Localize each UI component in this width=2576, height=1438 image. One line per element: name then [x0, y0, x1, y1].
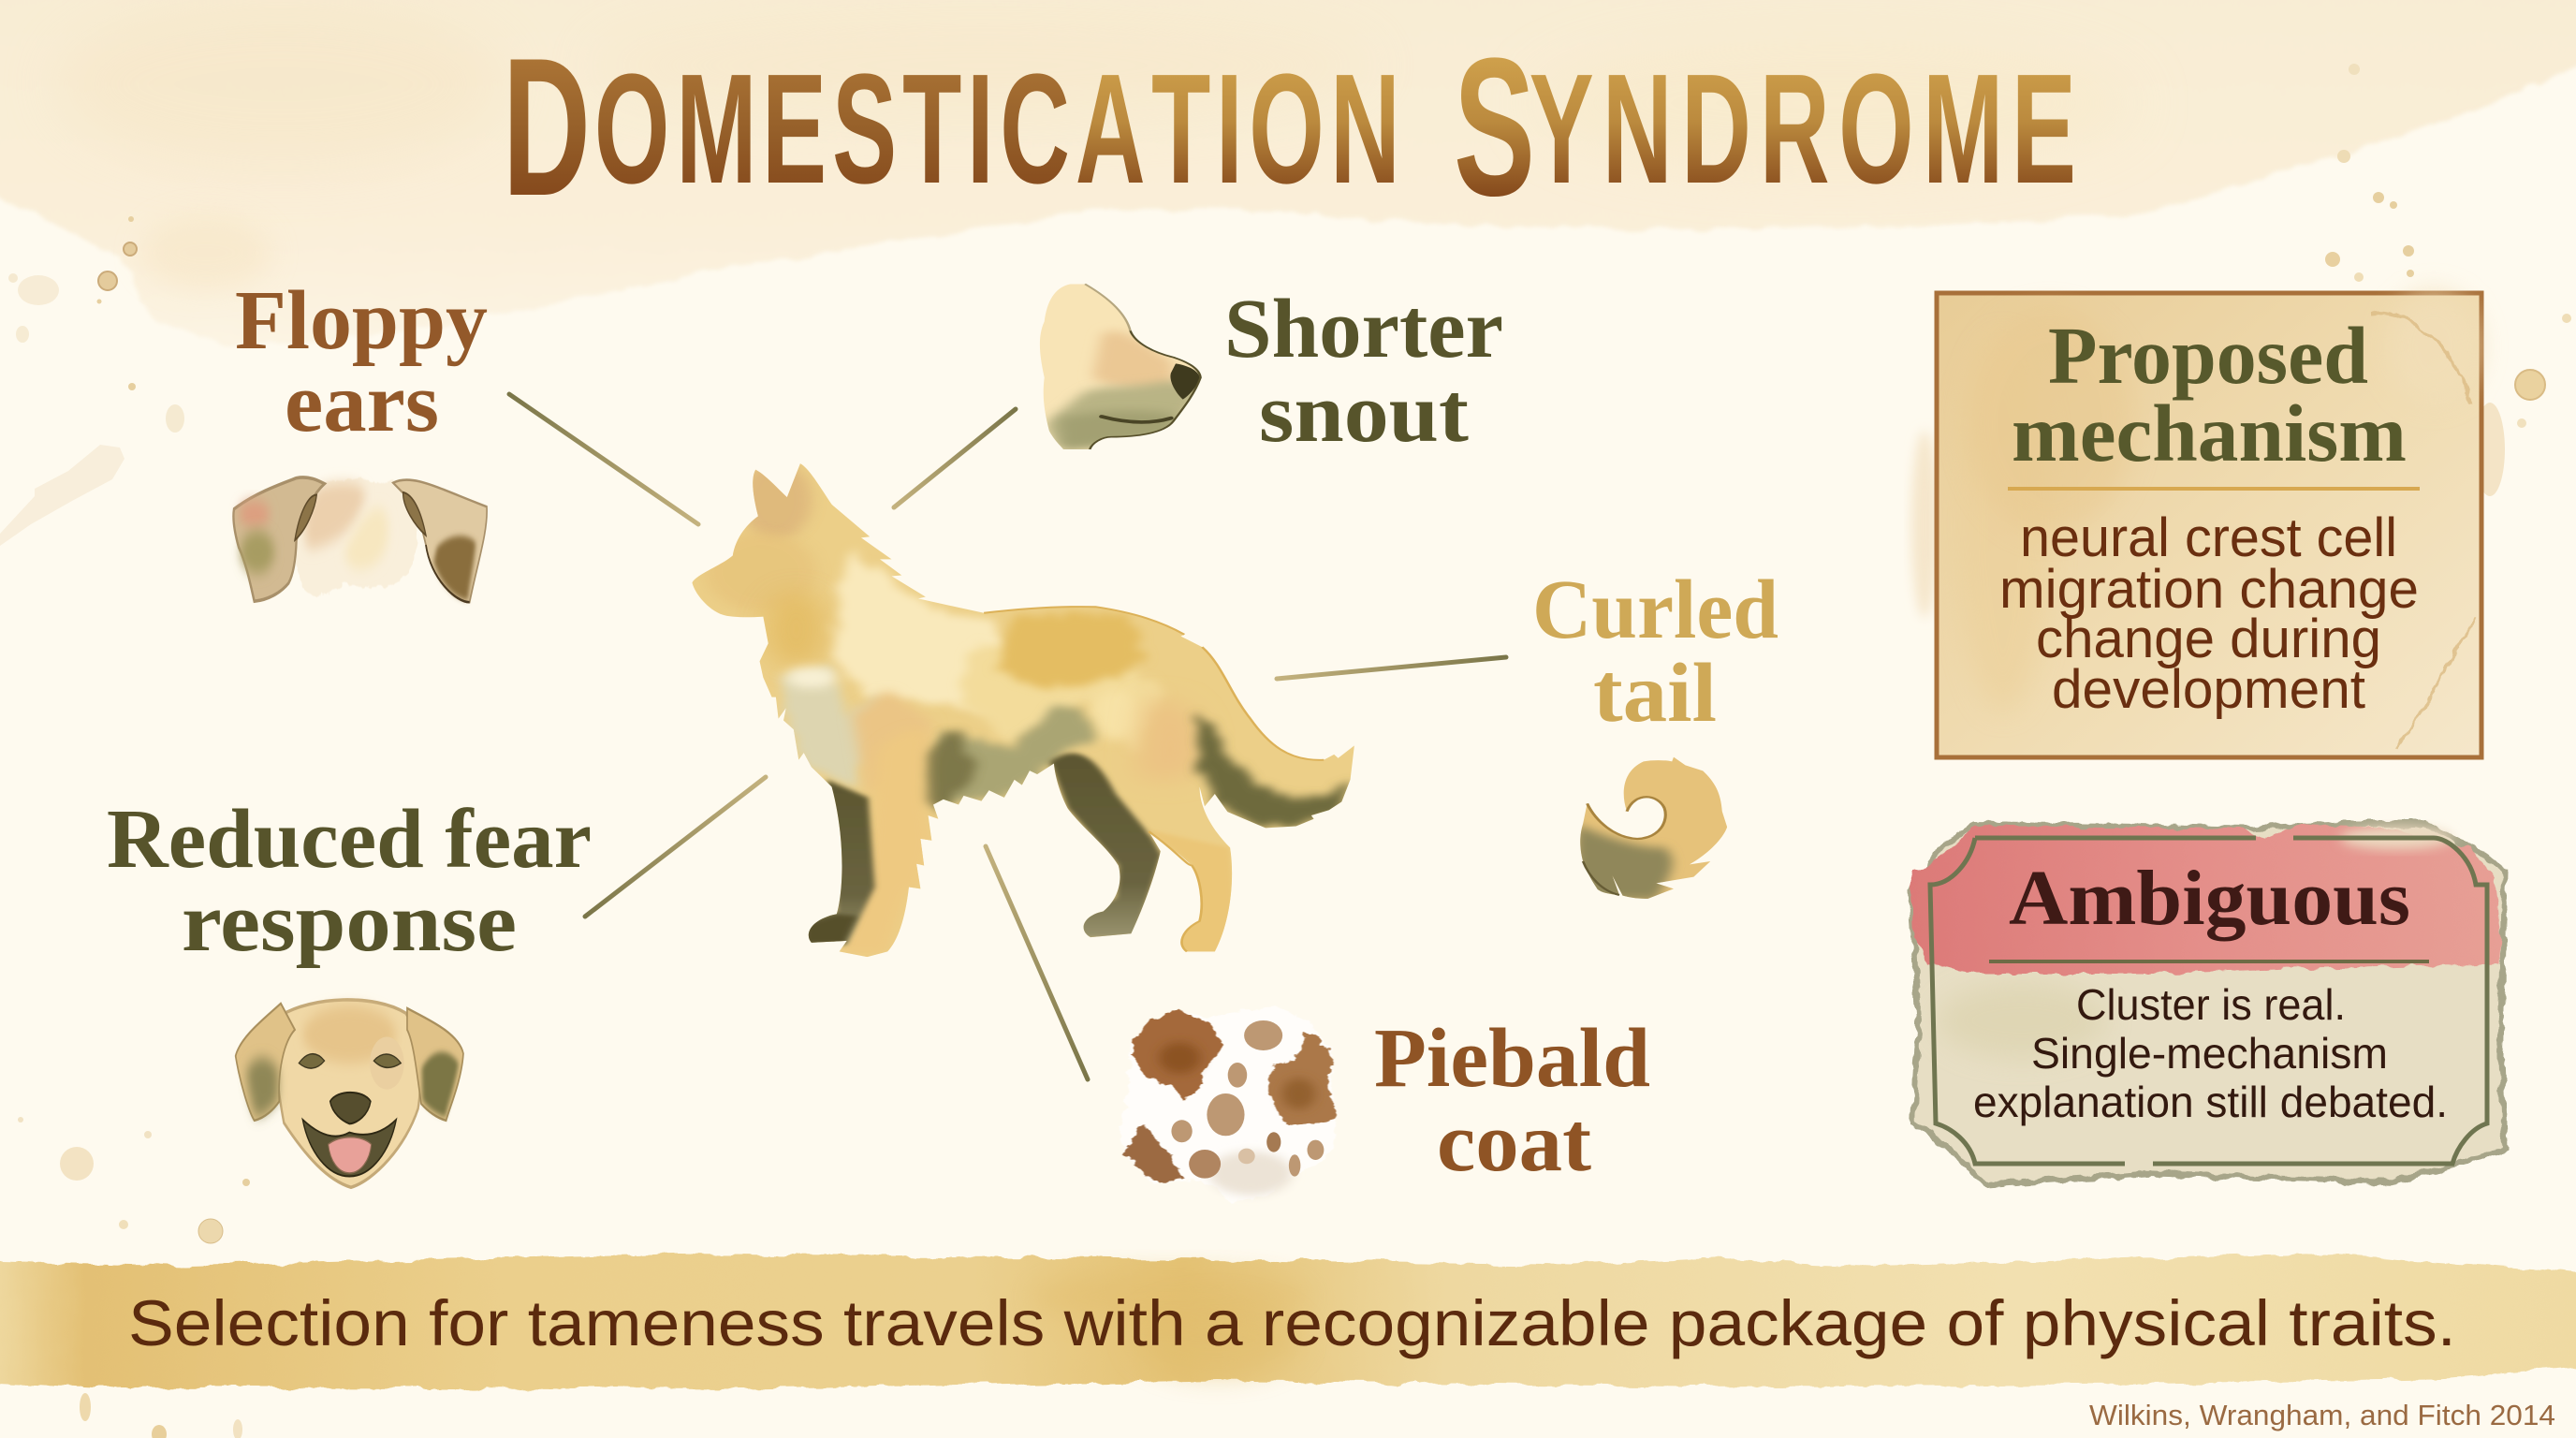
- ambiguous text: Cluster is real.: [2076, 980, 2346, 1029]
- ambiguous heading: Ambiguous: [2009, 855, 2410, 942]
- panel: proposed mechanism: [1911, 290, 2505, 757]
- trait label: curled tail: tail: [1593, 647, 1717, 740]
- ambiguous text: explanation still debated.: [1973, 1078, 2448, 1126]
- trait label: shorter snout: snout: [1259, 367, 1469, 460]
- proposed mechanism text: migration change: [1999, 559, 2419, 620]
- left ear: [233, 477, 325, 601]
- red heading wash: [1910, 824, 2501, 974]
- icon: shorter snout: [1039, 283, 1202, 449]
- proposed mechanism text: [1999, 507, 2419, 720]
- ambiguous text: Single-mechanism: [2031, 1029, 2388, 1078]
- trait label: floppy ears: [235, 274, 488, 449]
- connector lines: [509, 394, 1506, 1079]
- trait label: floppy ears: Floppy: [235, 274, 488, 367]
- trait label: floppy ears: ears: [285, 357, 439, 449]
- icon: floppy ears: [233, 477, 487, 602]
- bottom takeaway banner: [0, 1254, 2576, 1389]
- proposed mechanism text: neural crest cell: [2020, 507, 2397, 568]
- central dog silhouette: [693, 463, 1354, 957]
- watercolor wash: top of page: [0, 0, 2576, 345]
- proposed mechanism heading: Proposed: [2048, 310, 2368, 401]
- bottom takeaway banner: Selection for tameness travels with a recognizable package of physical traits.: [128, 1287, 2456, 1359]
- title: S: [1454, 18, 1535, 238]
- title: ATION: [1076, 42, 1431, 216]
- panel: ambiguous verdict: [1910, 824, 2505, 1184]
- trait label: curled tail: [1532, 564, 1778, 740]
- source citation: Wilkins, Wrangham, and Fitch 2014: [2089, 1399, 2555, 1431]
- title: D: [503, 18, 591, 238]
- trait label: piebald coat: Piebald: [1374, 1012, 1650, 1105]
- trait label: piebald coat: [1374, 1012, 1650, 1189]
- trait label: piebald coat: coat: [1437, 1096, 1591, 1189]
- icon: curled tail: [1580, 756, 1727, 899]
- proposed mechanism text: change during: [2036, 609, 2381, 669]
- trait label: shorter snout: [1224, 283, 1503, 460]
- ambiguous text: [1973, 980, 2448, 1126]
- title: OMESTIC: [594, 42, 1070, 216]
- notched inner frame: [1930, 838, 2487, 1164]
- trait label: curled tail: Curled: [1532, 564, 1778, 656]
- trait label: reduced fear response: [107, 793, 592, 969]
- icon: happy dog face: [236, 1000, 463, 1187]
- proposed mechanism text: development: [2052, 659, 2365, 720]
- title: [503, 18, 2076, 238]
- trait label: shorter snout: Shorter: [1224, 283, 1503, 375]
- icon: piebald coat patch: [1121, 1006, 1339, 1203]
- trait label: reduced fear response: response: [182, 876, 517, 969]
- title: YNDROME: [1530, 42, 2076, 216]
- proposed mechanism heading: [2012, 310, 2407, 478]
- proposed mechanism heading: mechanism: [2012, 388, 2407, 478]
- trait label: reduced fear response: Reduced fear: [107, 793, 592, 886]
- right ear: [393, 479, 487, 602]
